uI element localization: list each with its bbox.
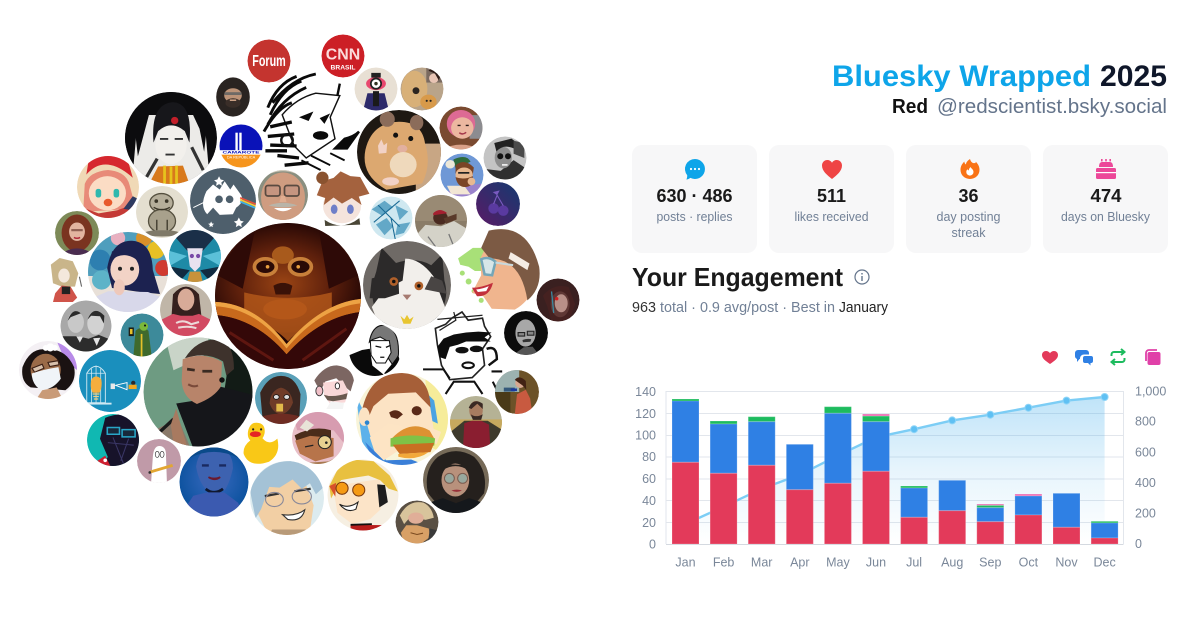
month labels: Jan — [675, 556, 696, 570]
left axis labels: 40 — [642, 494, 656, 508]
avatar: man with cap and black shirt — [144, 338, 252, 446]
avatar: painting woman in red — [495, 370, 539, 414]
cumulative area — [686, 397, 1105, 544]
stacked bars — [672, 399, 1118, 544]
avatar: dark red haired character — [536, 278, 580, 322]
avatar: Forum logo — [248, 40, 290, 82]
legend: reposts arrows — [1112, 349, 1124, 365]
avatar bubble cluster — [19, 34, 579, 544]
stat card: days on Bluesky: days on Bluesky — [1061, 209, 1150, 224]
avatar: cartoon with pink cap — [292, 412, 344, 464]
bars: reposts — [672, 399, 1118, 523]
month labels: Mar — [751, 556, 772, 570]
avatar: man in red cap reclining — [415, 195, 467, 247]
legend: quotes copies — [1146, 350, 1160, 365]
month labels: Sep — [979, 556, 1001, 570]
engagement summary: January — [839, 300, 889, 316]
avatar: blonde woman with cat — [396, 500, 438, 544]
header: title: Bluesky Wrapped — [832, 60, 1091, 93]
avatar: two men black and white — [60, 300, 112, 352]
stat card: day posting streak: 36 — [958, 186, 978, 206]
avatar: blue lit woman with choker — [180, 448, 248, 516]
avatar: CNN Brasil logo: CNN — [326, 46, 360, 63]
avatar: skull with prism — [190, 168, 256, 234]
icon: flame — [960, 159, 980, 179]
stat card: day posting streak — [906, 145, 1031, 253]
legend: replies chat — [1075, 350, 1093, 366]
right axis labels: 1,000 — [1135, 384, 1166, 398]
engagement summary: 963 — [632, 300, 656, 316]
avatar: cherries on purple — [476, 182, 520, 226]
avatar: woman with curly hair and glasses — [423, 447, 489, 513]
right axis labels: 0 — [1135, 537, 1142, 551]
avatar: man in red shirt — [450, 396, 502, 448]
month labels: Nov — [1055, 556, 1078, 570]
stat card: day posting streak: streak — [952, 225, 986, 240]
stat card: posts and replies: posts · replies — [656, 209, 733, 224]
avatar: woman wearing mask — [19, 341, 77, 399]
avatar: hooded brown character — [255, 372, 307, 424]
avatar: red hat anime girl — [77, 156, 139, 218]
avatar: ink portrait line art — [264, 74, 359, 170]
left axis labels: 60 — [642, 472, 656, 486]
avatar: ink woman resting on hand — [349, 324, 401, 376]
avatar: CNN Brasil logo: BRASIL — [331, 64, 356, 71]
avatar: Forum logo: Forum — [252, 53, 286, 70]
engagement summary: total · 0.9 avg/post · Best in — [660, 300, 835, 316]
month labels: Dec — [1093, 556, 1116, 570]
grid lines — [666, 391, 1124, 544]
avatar: older man with glasses — [258, 170, 308, 222]
avatar: plush toys — [400, 68, 444, 110]
avatar: grumpy cartoon line art — [423, 312, 502, 394]
avatar: ghost with bat — [137, 439, 181, 483]
avatar: Camarote logo — [220, 124, 262, 168]
icon: heart — [822, 160, 842, 179]
avatar: hamster — [357, 110, 445, 194]
header: profile name and handle: @redscientist.bsky.social — [937, 96, 1167, 118]
avatar: woman eating burger — [356, 373, 448, 465]
avatar: man caricature with beard — [314, 365, 354, 409]
avatar: fractal mirror art — [169, 230, 221, 282]
avatar: light bulb in cage — [79, 350, 141, 412]
avatar: blue and white texture — [370, 196, 412, 240]
legend: likes heart — [1042, 351, 1058, 364]
avatar: Camarote logo: DA REPÚBLICA — [227, 154, 256, 159]
stat card: posts and replies: 630 · 486 — [656, 186, 732, 206]
stat card: day posting streak: day posting — [936, 209, 1000, 224]
right axis labels: 200 — [1135, 506, 1156, 520]
chart legend icons — [1042, 349, 1160, 366]
bars: quotes — [862, 414, 1042, 505]
avatar: CNN Brasil logo — [322, 34, 364, 78]
avatar: white and black persian cat — [363, 241, 451, 329]
avatar: darth vader with glasses — [87, 414, 139, 466]
avatar: eye camera figure — [354, 68, 398, 110]
left axis labels: 0 — [649, 538, 656, 552]
left axis labels: 100 — [635, 428, 656, 442]
stat card: likes received: 511 — [817, 186, 846, 206]
stat card: posts and replies — [632, 145, 757, 253]
avatar: blond man with orange glasses — [328, 460, 398, 530]
avatar: rubber duck — [244, 423, 278, 464]
avatar: bearded man cartoon — [216, 77, 250, 117]
stat card: likes received: likes received — [794, 209, 868, 224]
right axis labels: 800 — [1135, 414, 1156, 428]
chart: monthly engagement bars with cumulative line — [635, 384, 1166, 570]
stat card: likes received — [769, 145, 894, 253]
right axis labels — [1135, 384, 1166, 551]
avatar: silver haired anime man — [250, 461, 324, 535]
month labels: Jul — [906, 556, 922, 570]
avatar: woman with pink hair — [440, 106, 482, 150]
avatar: chibi brown hair — [316, 171, 369, 226]
engagement summary — [632, 300, 889, 316]
avatar: toad sketch — [136, 186, 188, 238]
avatar: blond figure sketch — [51, 258, 82, 302]
cumulative line — [686, 397, 1105, 524]
month labels: Apr — [790, 556, 810, 570]
month labels: Aug — [941, 556, 963, 570]
left axis labels: 20 — [642, 516, 656, 530]
avatar: black and white man in sunglasses — [484, 136, 526, 180]
left axis labels: 120 — [635, 407, 656, 421]
heading: Your Engagement: Your Engagement — [632, 262, 843, 292]
month labels: Oct — [1019, 556, 1039, 570]
avatar: woman with red hair — [55, 211, 99, 255]
avatar: bald man with glasses — [504, 311, 548, 355]
bars: replies — [672, 401, 1118, 538]
month labels — [675, 556, 1116, 570]
icon: info — [855, 270, 869, 284]
icon: speech bubble — [685, 159, 705, 180]
stat card: days on Bluesky: 474 — [1090, 186, 1122, 206]
cumulative points — [911, 394, 1108, 433]
avatar: Camarote logo: CAMAROTE — [223, 150, 260, 155]
avatar: woman caricature with green splash — [458, 229, 540, 310]
right axis labels: 400 — [1135, 476, 1156, 490]
month labels: May — [826, 556, 850, 570]
month labels: Feb — [713, 556, 734, 570]
header: profile name and handle: Red — [892, 96, 928, 118]
right axis labels: 600 — [1135, 446, 1156, 460]
avatar: monkey with glowing book — [215, 223, 361, 369]
left axis labels — [635, 385, 656, 552]
bars: likes — [672, 462, 1118, 544]
avatar: bearded cartoon with hat — [440, 154, 484, 196]
left axis labels: 140 — [635, 385, 656, 399]
month labels: Jun — [866, 556, 886, 570]
stat card: days on Bluesky — [1043, 145, 1168, 253]
avatar: japanese woman with flowers — [88, 230, 171, 312]
avatar: hooded ink figure — [125, 92, 217, 184]
icon: birthday cake — [1096, 159, 1116, 179]
avatar: woman in pink shirt — [160, 284, 212, 336]
avatar: green swamp creature tarot — [120, 314, 164, 356]
left axis labels: 80 — [642, 450, 656, 464]
header: title: 2025 — [1100, 60, 1167, 93]
